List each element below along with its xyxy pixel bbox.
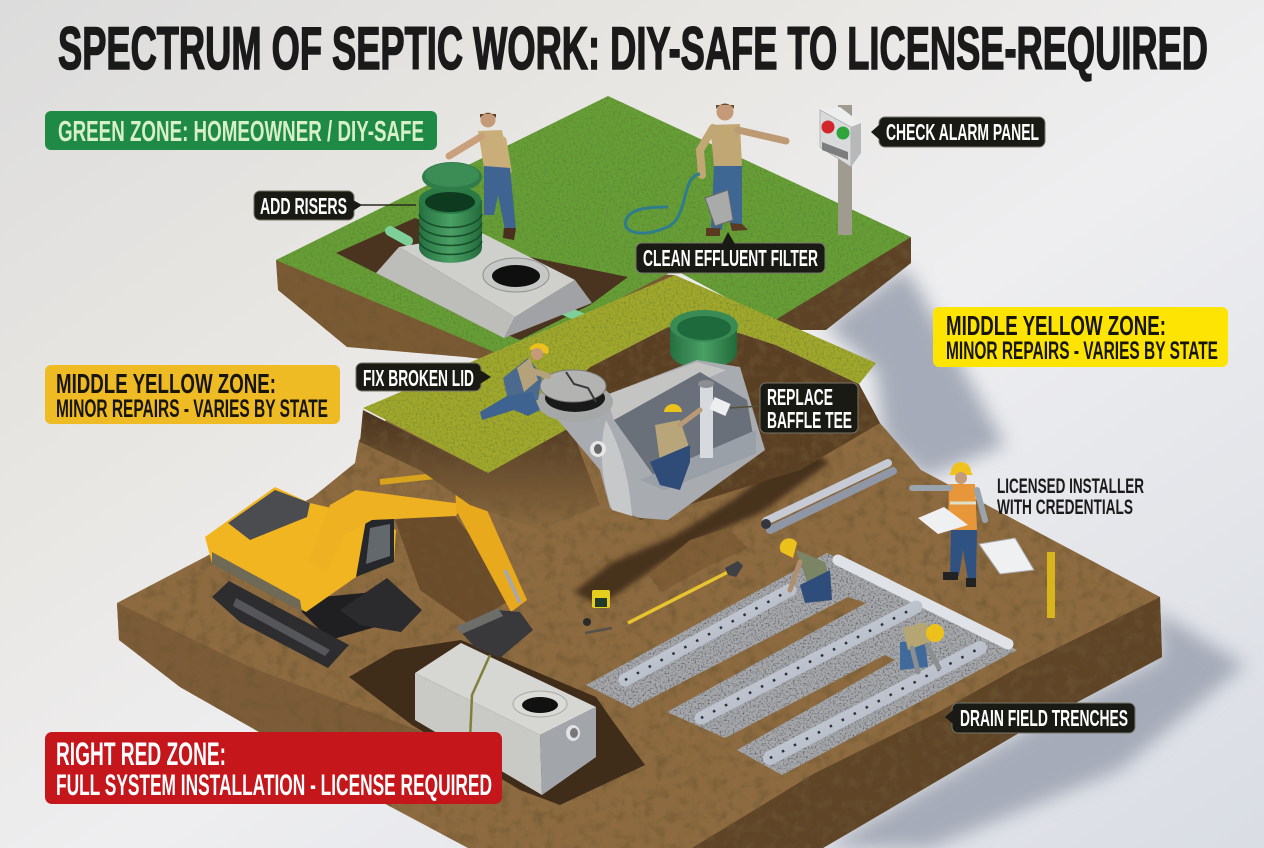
green pipes [390, 231, 582, 318]
dark dug-out bank [395, 510, 510, 625]
side outlet [590, 441, 606, 457]
licensed installer [912, 462, 985, 587]
callout: replace baffle tee: REPLACE [767, 384, 833, 410]
drain field trenches [586, 553, 1017, 775]
zone tag: green [45, 111, 437, 150]
zone tag: red: FULL SYSTEM INSTALLATION - LICENSE REQUIRED [56, 769, 492, 802]
rear track [340, 578, 422, 632]
yellow zone riser [670, 310, 738, 368]
worker fixing broken lid [480, 343, 549, 420]
callout: clean effluent filter [636, 232, 825, 273]
callout: check alarm panel: CHECK ALARM PANEL [886, 119, 1039, 145]
trench worker 2 [900, 622, 944, 672]
yellow grass [363, 275, 876, 473]
alarm panel sign [820, 105, 861, 235]
undercarriage [290, 590, 400, 640]
grass top: green platform [276, 96, 911, 357]
stacked pipes [761, 463, 893, 530]
perforated pipe 1 [625, 590, 790, 680]
right front face [692, 597, 1162, 848]
front track [212, 581, 349, 668]
callout: replace baffle tee: BAFFLE TEE [767, 407, 852, 433]
callout: licensed installer: LICENSED INSTALLER [997, 475, 1144, 498]
shovel and tools [583, 561, 743, 633]
excavated pit for the new tank [349, 640, 645, 805]
soil silhouette [117, 400, 1162, 848]
green riser with lid [419, 162, 482, 263]
callout: drain field trenches: DRAIN FIELD TRENCHES [960, 705, 1128, 731]
zone tag: red [45, 732, 502, 804]
cutaway concrete tank [537, 360, 765, 520]
callout: fix broken lid: FIX BROKEN LID [363, 365, 474, 391]
blueprints [979, 538, 1034, 574]
gravel beds [586, 553, 1017, 775]
trench worker 1 [780, 538, 832, 603]
callout: licensed installer: WITH CREDENTIALS [997, 496, 1133, 519]
hose [625, 174, 700, 233]
cab [356, 517, 394, 577]
yellow zone platform [360, 275, 880, 530]
worker inside tank [650, 404, 700, 490]
survey level [1047, 552, 1055, 618]
callout: add risers: ADD RISERS [260, 193, 347, 219]
man adding risers [449, 112, 516, 240]
open trench around tank [336, 218, 628, 340]
grass cover left of tank [276, 240, 530, 357]
distribution header pipe [838, 560, 1008, 644]
cast shadows on the backdrop [823, 268, 1245, 848]
man cleaning effluent filter [700, 104, 786, 236]
terrace ridge shadow [574, 448, 830, 606]
excavator [205, 472, 533, 668]
zone tag: yellow left: MINOR REPAIRS - VARIES BY STATE [56, 395, 328, 423]
exposed soil behind tank [556, 327, 880, 520]
soil face below grass [360, 410, 600, 530]
left cut face [117, 603, 426, 807]
dirt mound [648, 528, 748, 592]
callout: check alarm panel [871, 117, 1045, 147]
callout: clean effluent filter: CLEAN EFFLUENT FILTER [643, 245, 818, 271]
bucket [456, 610, 533, 658]
zone tag: red: RIGHT RED ZONE: [56, 736, 226, 772]
boom and arm [308, 490, 462, 572]
soil faces: green platform [276, 260, 675, 362]
callout: drain field trenches [945, 703, 1135, 733]
baffle tee [698, 380, 728, 458]
new concrete tank [415, 643, 596, 795]
zone tag: yellow left [45, 365, 340, 424]
perforated pipe 3 [770, 648, 980, 758]
filter basket [705, 190, 733, 226]
callout: replace baffle tee [730, 383, 858, 433]
lid [422, 162, 482, 192]
zone tag: yellow left: MIDDLE YELLOW ZONE: [56, 368, 276, 399]
callout: licensed installer [997, 475, 1144, 519]
broken lid [540, 370, 606, 402]
green platform [276, 96, 911, 362]
callout: fix broken lid [356, 363, 491, 391]
perforated pipe 2 [701, 607, 916, 718]
zone tag: yellow right [933, 307, 1228, 367]
zone tag: green: GREEN ZONE: HOMEOWNER / DIY-SAFE [58, 116, 424, 148]
house body [205, 487, 396, 612]
engine cover [228, 490, 310, 540]
lower platform: red zone ground [117, 400, 1162, 848]
green-zone septic tank [376, 233, 592, 338]
